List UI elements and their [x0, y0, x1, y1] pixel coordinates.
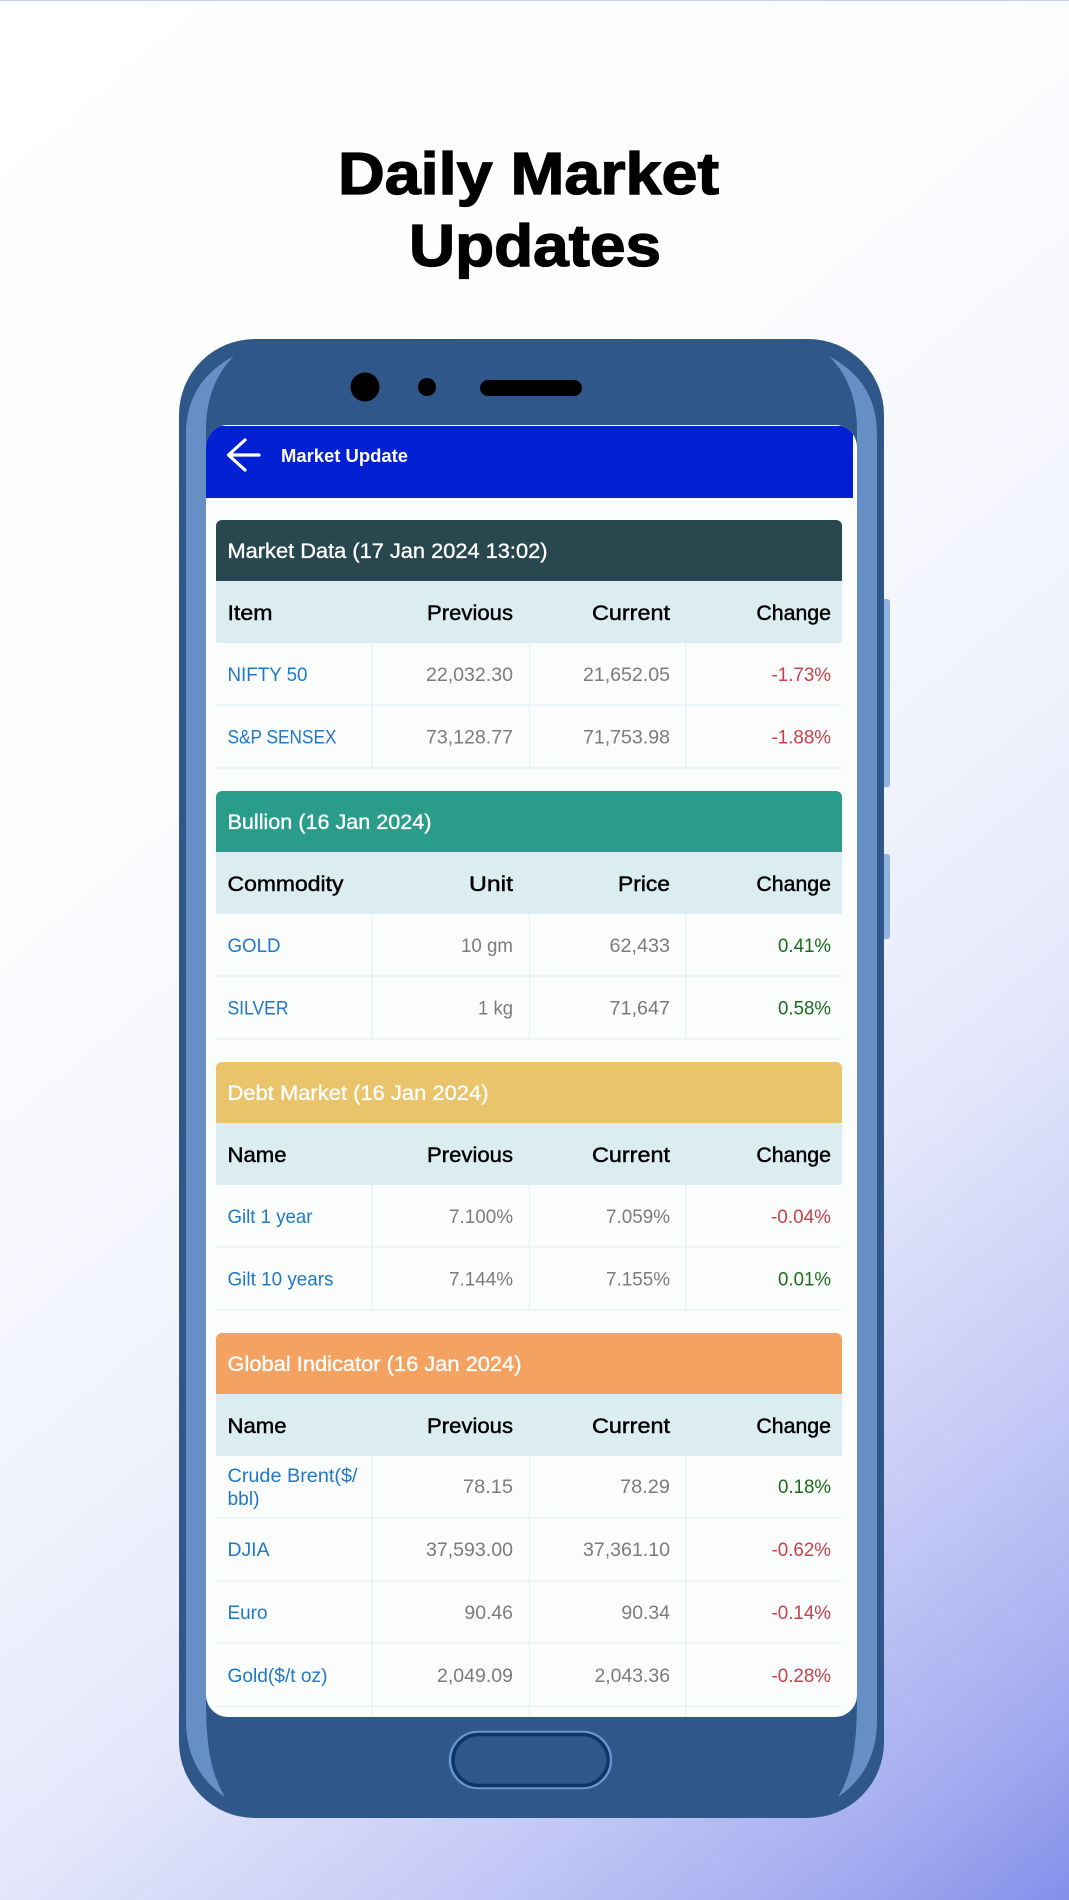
section heading: [216, 1062, 842, 1123]
column headers: Name: [228, 1143, 286, 1167]
row: Crude Brent: Crude Brent($/: [228, 1465, 358, 1487]
row: S&P SENSEX: [228, 730, 830, 746]
row: S&P SENSEX: 71,753.98: [583, 726, 670, 748]
phone side button: power: [882, 854, 890, 939]
speaker: [480, 380, 582, 396]
row: Crude Brent: bbl): [228, 1488, 260, 1510]
phone left edge highlight: [186, 356, 234, 1797]
row: GOLD: [228, 938, 830, 956]
row: Euro: 90.34: [621, 1602, 670, 1624]
front camera: [350, 372, 380, 402]
column headers: [216, 581, 842, 643]
row: Crude Brent: 0.18%: [778, 1476, 831, 1498]
section heading: Bullion (16 Jan 2024): [228, 811, 432, 834]
column headers: Unit: [469, 872, 513, 896]
row: Gilt 10 years: Gilt 10 years: [228, 1268, 334, 1290]
row: DJIA: 37,361.10: [583, 1539, 670, 1561]
column headers: [216, 1394, 842, 1456]
row: Gold per troy ounce: -0.28%: [772, 1665, 831, 1687]
column headers: Change: [756, 872, 831, 896]
row: Euro: -0.14%: [772, 1602, 831, 1624]
column headers: Previous: [427, 601, 513, 625]
title: Daily Market: [338, 141, 719, 207]
row: GOLD: GOLD: [228, 935, 280, 957]
row: Gold per troy ounce: 2,043.36: [594, 1665, 670, 1687]
panel: market data: [216, 520, 842, 768]
row: NIFTY 50: -1.73%: [772, 664, 831, 686]
phone right edge highlight: [829, 356, 877, 1797]
section heading: Market Data (17 Jan 2024 13:02): [228, 540, 548, 563]
title: [338, 141, 719, 279]
column headers: Change: [756, 601, 831, 625]
row: Gold per troy ounce: 2,049.09: [437, 1665, 513, 1687]
row: SILVER: SILVER: [228, 998, 288, 1020]
row: Gilt 1 year: -0.04%: [771, 1206, 831, 1228]
panel: bullion: [216, 791, 842, 1039]
column headers: Current: [592, 601, 670, 625]
section heading: [216, 520, 842, 581]
phone body: [179, 339, 884, 1818]
row: SILVER: 71,647: [610, 998, 670, 1020]
row: DJIA: [229, 1542, 830, 1558]
row: Crude Brent: 78.29: [620, 1476, 670, 1498]
column headers: Change: [756, 1143, 831, 1167]
home button: [450, 1732, 611, 1788]
phone screen: [206, 425, 857, 1723]
row: Gilt 10 years: [228, 1272, 830, 1290]
row: S&P SENSEX: S&P SENSEX: [228, 726, 336, 748]
proximity sensor: [418, 378, 436, 396]
row: Gilt 1 year: Gilt 1 year: [228, 1206, 313, 1228]
row: Gilt 1 year: 7.100%: [449, 1206, 513, 1228]
app bar: [206, 426, 853, 498]
row: Gilt 1 year: 7.059%: [606, 1206, 670, 1228]
section heading: [216, 791, 842, 852]
row: DJIA: 37,593.00: [426, 1539, 513, 1561]
title: Updates: [409, 213, 661, 279]
section heading: Global Indicator (16 Jan 2024): [228, 1353, 522, 1376]
app bar title: Market Update: [281, 445, 408, 466]
column headers: Change: [756, 1414, 831, 1438]
row: S&P SENSEX: -1.88%: [772, 726, 831, 748]
row: Gold per troy ounce: [228, 1667, 830, 1686]
row: Gilt 1 year: [228, 1209, 830, 1227]
row: NIFTY 50: 22,032.30: [426, 664, 513, 686]
row: Crude Brent: [228, 1465, 831, 1510]
section heading: Debt Market (16 Jan 2024): [228, 1082, 488, 1105]
column headers: Previous: [427, 1143, 513, 1167]
column headers: Price: [618, 872, 670, 896]
column headers: Item: [228, 601, 272, 625]
row: Gilt 10 years: 7.144%: [449, 1268, 513, 1290]
column headers: Current: [592, 1143, 670, 1167]
row: DJIA: -0.62%: [772, 1539, 831, 1561]
row: Gilt 10 years: 0.01%: [778, 1268, 831, 1290]
panel: global indicator: [216, 1333, 842, 1723]
icon: back arrow: [228, 440, 259, 470]
row: GOLD: 62,433: [610, 935, 670, 957]
row: Euro: [229, 1606, 830, 1619]
row: S&P SENSEX: 73,128.77: [426, 726, 513, 748]
row: Gilt 10 years: 7.155%: [606, 1268, 670, 1290]
row: GOLD: 10 gm: [461, 935, 513, 957]
column headers: Previous: [427, 1414, 513, 1438]
row: GOLD: 0.41%: [778, 935, 831, 957]
panel: debt market: [216, 1062, 842, 1310]
row: SILVER: 0.58%: [778, 998, 831, 1020]
column headers: [216, 852, 842, 914]
column headers: Commodity: [228, 872, 344, 896]
section heading: [216, 1333, 842, 1394]
column headers: Name: [228, 1414, 286, 1438]
column headers: Current: [592, 1414, 670, 1438]
row: SILVER: 1 kg: [478, 998, 513, 1020]
row: Euro: Euro: [228, 1602, 268, 1624]
row: SILVER: [228, 1000, 830, 1018]
row: Gold per troy ounce: Gold($/t oz): [228, 1665, 328, 1687]
row: NIFTY 50: NIFTY 50: [228, 664, 308, 686]
phone side button: volume: [882, 599, 890, 787]
row: DJIA: DJIA: [228, 1539, 270, 1561]
column headers: [216, 1123, 842, 1185]
row: Euro: 90.46: [464, 1602, 513, 1624]
row: Crude Brent: 78.15: [463, 1476, 513, 1498]
row: NIFTY 50: 21,652.05: [583, 664, 670, 686]
row: NIFTY 50: [229, 668, 830, 684]
